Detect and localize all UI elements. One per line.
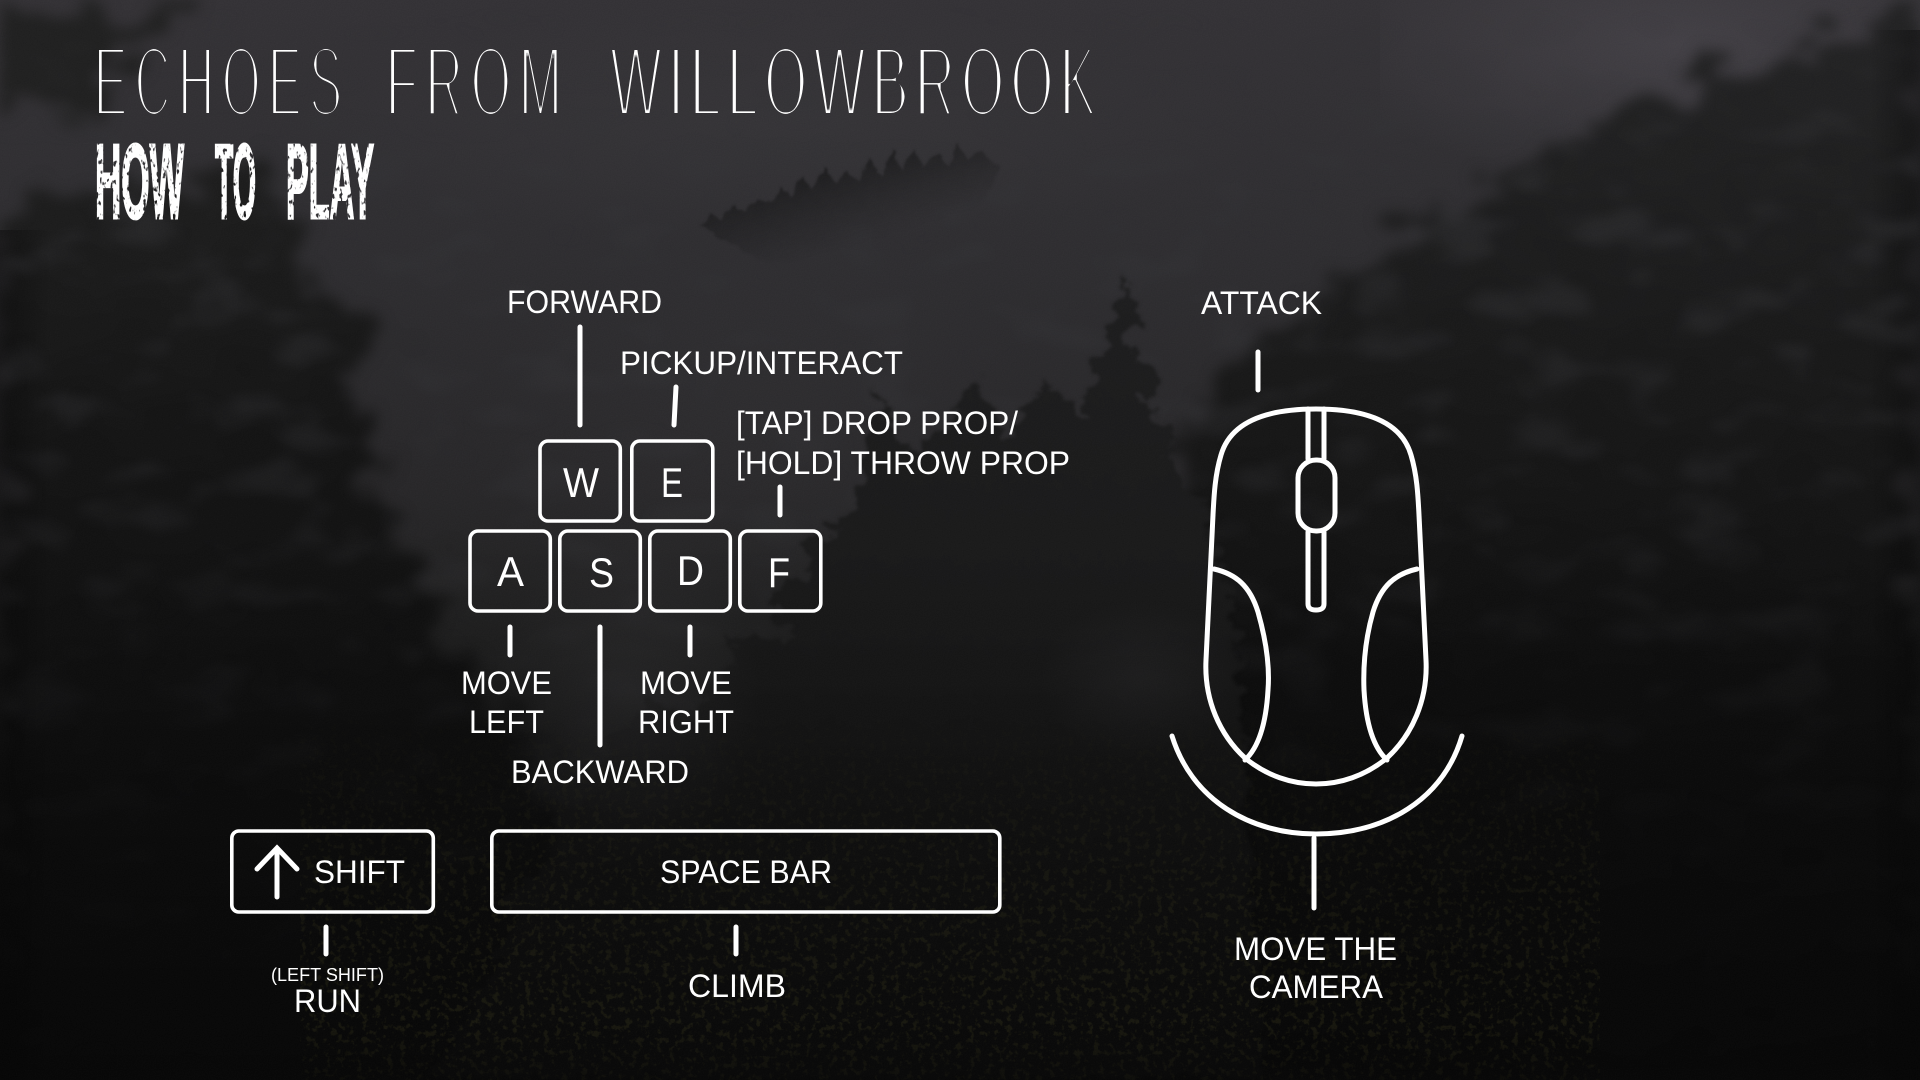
label: move the camera: MOVE THE: [1234, 931, 1397, 967]
connector: W to forward: [578, 327, 582, 425]
subtitle: How to play: HOW: [95, 123, 184, 241]
title: Echoes from Willowbrook: FROM: [386, 26, 570, 138]
key E: E: [661, 459, 683, 506]
title: Echoes from Willowbrook: WILLOWBROOK: [610, 26, 1103, 138]
title: Echoes from Willowbrook: ECHOES: [94, 26, 350, 138]
key A: [470, 531, 550, 611]
label: climb: CLIMB: [688, 968, 786, 1004]
key: space bar: [492, 831, 1000, 912]
key S: S: [589, 549, 614, 596]
key S: [560, 531, 640, 611]
label: move left: MOVE: [461, 665, 552, 701]
label: run: RUN: [294, 983, 361, 1019]
label: move the camera: [1234, 931, 1397, 1005]
key: shift: [232, 831, 433, 912]
label: drop or throw prop: [736, 405, 1070, 481]
connector: E to pickup: [674, 387, 676, 425]
label: attack: ATTACK: [1201, 285, 1322, 321]
keyboard panel: WASD and F keys: [461, 284, 1070, 790]
label: move left: [461, 665, 552, 740]
connector: mouse to camera label: [1312, 838, 1316, 908]
key E: [632, 441, 713, 521]
key W: W: [563, 459, 599, 506]
connector: F to prop label: [778, 487, 782, 515]
shift key panel: [232, 831, 433, 1019]
label: move left: LEFT: [469, 704, 544, 740]
icon: movement arc: [1172, 736, 1462, 834]
text: PLAY: [286, 123, 374, 241]
icon: up arrow: [257, 848, 297, 897]
label: forward: FORWARD: [507, 284, 662, 320]
subtitle: How to play: TO: [215, 123, 256, 241]
label: move right: MOVE: [640, 665, 732, 701]
connector: left click to attack: [1256, 352, 1260, 390]
key D: [650, 531, 730, 611]
space bar panel: [492, 831, 1000, 1004]
label: move the camera: CAMERA: [1249, 969, 1384, 1005]
misty tree line on the ridge: [700, 142, 1000, 260]
mouse panel: [1172, 285, 1462, 1005]
connector: D to move right: [688, 627, 692, 655]
label: move right: RIGHT: [638, 704, 734, 740]
key W: [540, 441, 620, 521]
label: drop or throw prop: [TAP] DROP PROP/: [736, 405, 1018, 441]
key F: F: [768, 549, 790, 596]
label: move right: [638, 665, 734, 740]
right side button: [1364, 569, 1417, 760]
mouse body: [1206, 409, 1426, 784]
key A: A: [497, 548, 524, 595]
icon: mouse: [1206, 409, 1426, 784]
connector: space bar to climb: [734, 927, 738, 954]
scroll strip: [1308, 409, 1324, 610]
label: pickup/interact: PICKUP/INTERACT: [620, 345, 903, 381]
label: backward: BACKWARD: [511, 754, 689, 790]
connector: A to move left: [508, 627, 512, 655]
key D: D: [677, 547, 704, 594]
key text: shift: SHIFT: [314, 854, 405, 890]
scroll wheel: [1298, 460, 1335, 531]
connector: shift to run: [324, 927, 328, 954]
note: left shift: (LEFT SHIFT): [271, 964, 384, 985]
title: Echoes from Willowbrook: [94, 26, 1103, 138]
label: drop or throw prop: [HOLD] THROW PROP: [736, 445, 1070, 481]
key text: space bar: SPACE BAR: [660, 854, 832, 890]
connector: S to backward: [598, 627, 602, 745]
left side button: [1214, 569, 1269, 760]
key F: [740, 531, 821, 611]
